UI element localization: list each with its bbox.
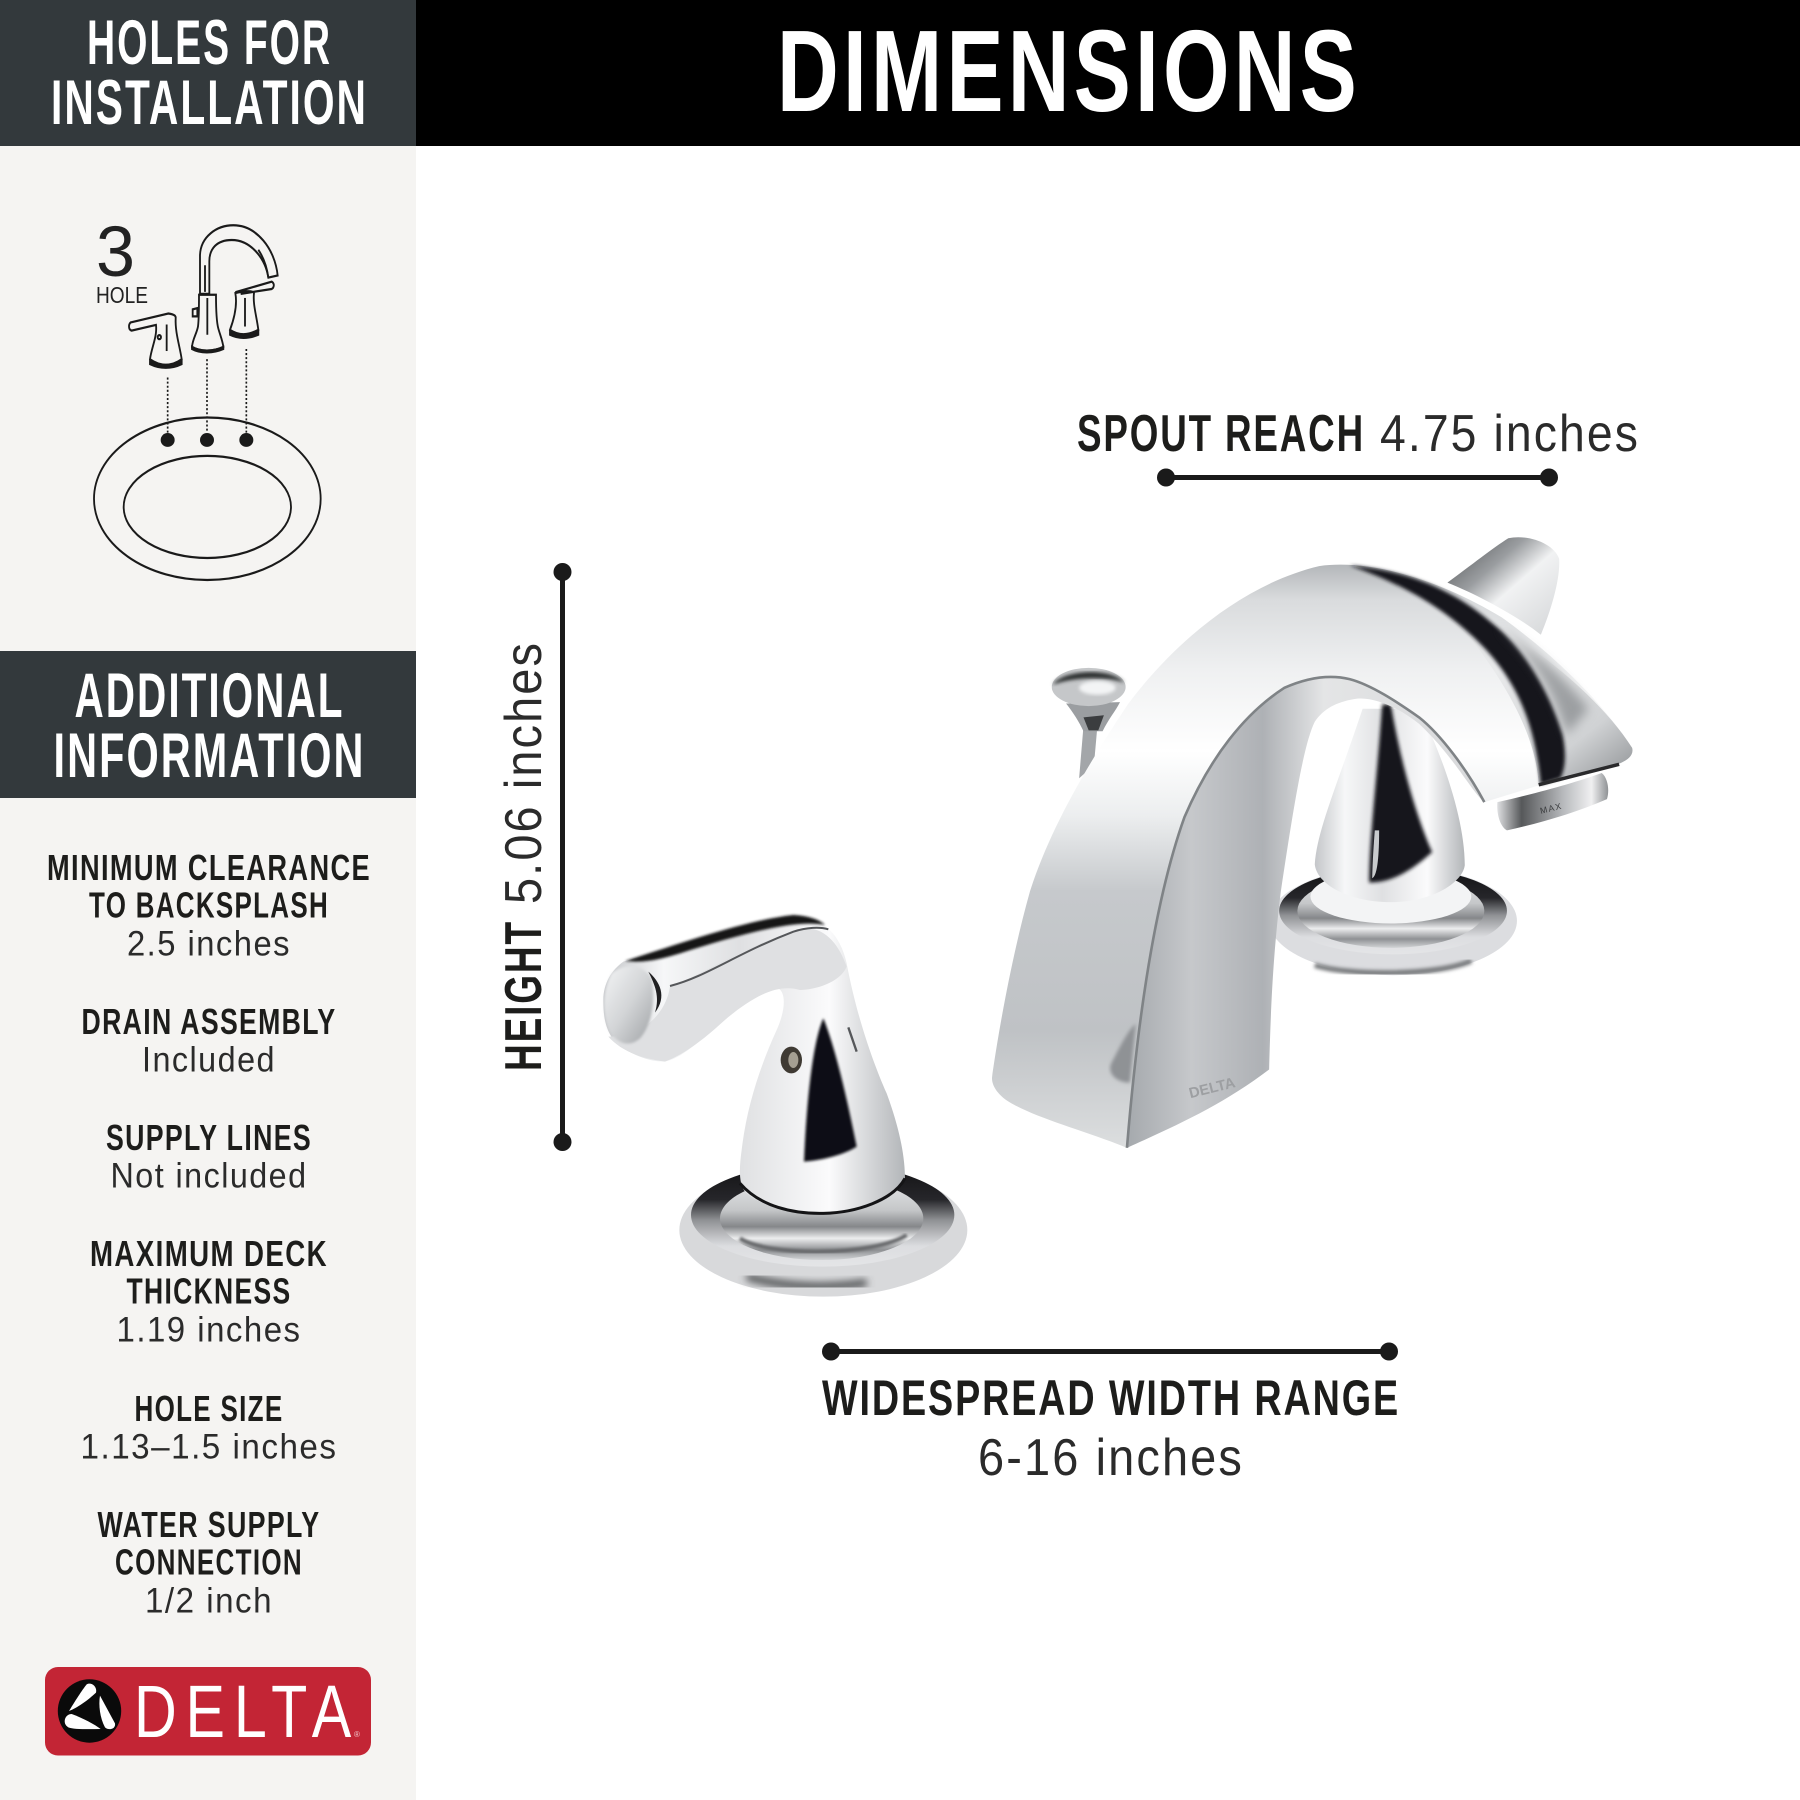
spec: water supply connection: 1/2 inch	[145, 1582, 273, 1620]
header: holes for installation	[0, 0, 416, 146]
spout	[200, 225, 278, 294]
main body left face	[992, 565, 1633, 1148]
header: additional information: INFORMATION	[54, 721, 366, 791]
spec: supply lines: Not included	[110, 1156, 308, 1196]
spec: supply lines: SUPPLY LINES	[106, 1117, 312, 1158]
photo: faucet spout and rear handle	[992, 537, 1633, 1148]
front handle body and lever	[603, 915, 905, 1213]
icon: delta triangle mark	[65, 1684, 115, 1729]
spec: minimum clearance to backsplash: TO BACKSPLASH	[89, 884, 329, 926]
arrow: height bar	[554, 563, 572, 1151]
brand mark on base: DELTA	[1188, 1075, 1237, 1102]
spec: hole size	[80, 1388, 338, 1466]
collar shadow	[740, 1178, 905, 1213]
spec: minimum clearance to backsplash: 2.5 inches	[127, 924, 291, 964]
panel: left sidebar	[0, 0, 416, 1800]
arrow: spout reach bar	[1157, 468, 1558, 486]
lever end face	[604, 966, 653, 1044]
spec: drain assembly: DRAIN ASSEMBLY	[82, 1001, 336, 1042]
spec: drain assembly: Included	[142, 1040, 276, 1080]
spec: maximum deck thickness: MAXIMUM DECK	[90, 1233, 328, 1274]
spec: hole size: 1.13–1.5 inches	[80, 1428, 338, 1466]
spec: minimum clearance to backsplash: MINIMUM CLEARANCE	[47, 847, 371, 888]
aerator	[1497, 773, 1608, 830]
base reflection	[1110, 1024, 1136, 1083]
photo: front faucet handle	[603, 915, 967, 1297]
right inner face and arch rim	[1127, 677, 1484, 1148]
logo: delta: ®	[354, 1730, 360, 1739]
sink and faucet line art	[94, 225, 321, 580]
label: 3 hole	[96, 213, 148, 308]
spec: water supply connection: CONNECTION	[115, 1542, 303, 1582]
title: DIMENSIONS	[777, 6, 1361, 136]
dimension: widespread width range	[822, 1342, 1400, 1487]
spout soft gray falloff	[1497, 626, 1589, 735]
header: additional information	[0, 651, 416, 798]
spout light region	[1354, 566, 1633, 785]
label: 3 hole: HOLE	[96, 282, 148, 308]
spec: hole size: HOLE SIZE	[134, 1388, 284, 1429]
rear lever	[1447, 537, 1559, 635]
dimension: spout reach	[1077, 405, 1640, 486]
header: holes for installation: HOLES FOR	[87, 8, 332, 78]
indicator	[848, 1027, 857, 1052]
icon: 3 hole faucet and sink diagram	[94, 213, 321, 580]
spec: maximum deck thickness	[90, 1233, 328, 1350]
aerator: MAX	[1539, 801, 1563, 816]
left handle	[129, 313, 182, 365]
spec: maximum deck thickness: THICKNESS	[126, 1270, 292, 1312]
header: holes for installation: INSTALLATION	[51, 68, 368, 138]
lever top black band	[625, 915, 825, 962]
header bar: dimensions	[416, 0, 1800, 146]
dimension: height: HEIGHT	[495, 920, 553, 1071]
dimension: height: 5.06 inches	[495, 641, 553, 904]
lever shading	[608, 928, 847, 1062]
spec: maximum deck thickness: 1.19 inches	[116, 1310, 302, 1350]
spec: water supply connection	[98, 1504, 320, 1620]
set screw hole	[781, 1047, 802, 1073]
spout dark reflection	[1350, 565, 1565, 784]
pop-up knob	[1052, 668, 1126, 778]
right handle	[230, 282, 274, 334]
logo: delta: DELTA	[134, 1671, 360, 1754]
dimension: height	[495, 563, 572, 1151]
spec: supply lines	[106, 1117, 312, 1196]
spec: water supply connection: WATER SUPPLY	[98, 1504, 320, 1545]
arrow: width bar	[822, 1342, 1398, 1360]
rear escutcheon	[1269, 867, 1517, 975]
dimension: widespread width range: WIDESPREAD WIDTH RANGE	[822, 1370, 1400, 1426]
header: additional information: ADDITIONAL	[74, 661, 344, 731]
front escutcheon	[679, 1163, 967, 1297]
dimension: spout reach: 4.75 inches	[1380, 405, 1640, 463]
dimension: spout reach: SPOUT REACH	[1077, 405, 1365, 463]
dimension: widespread width range: 6-16 inches	[978, 1429, 1244, 1487]
logo: delta	[45, 1667, 371, 1756]
central black reflection	[804, 1018, 857, 1162]
spec: drain assembly	[82, 1001, 336, 1080]
spec: minimum clearance to backsplash	[47, 847, 371, 964]
rear handle dome	[1315, 709, 1465, 902]
label: 3 hole: 3	[96, 213, 135, 292]
